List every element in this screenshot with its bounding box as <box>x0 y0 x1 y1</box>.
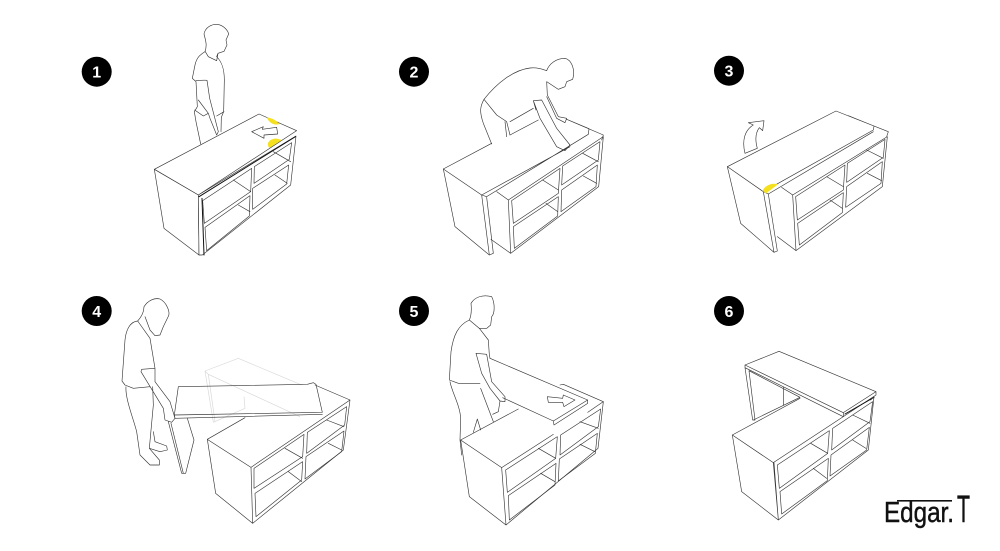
ghost panel position <box>205 358 302 422</box>
person holding panel <box>122 299 175 465</box>
number badge 6: 6 <box>725 304 734 321</box>
step 6 <box>714 296 876 520</box>
number badge 5 <box>399 296 429 326</box>
shelf unit with side panel <box>727 111 888 252</box>
yellow marker <box>763 184 778 193</box>
number badge 5: 5 <box>410 304 419 321</box>
person bending <box>481 58 574 151</box>
curved up arrow <box>744 121 764 153</box>
shelf unit <box>461 402 603 525</box>
shelf unit <box>154 114 297 255</box>
step 4 <box>82 296 350 523</box>
number badge 4 <box>82 296 112 326</box>
step 3 <box>714 56 888 252</box>
yellow markers <box>267 118 282 148</box>
rotated desk top <box>745 351 876 420</box>
logo Edgar.T: T <box>957 489 970 531</box>
number badge 2 <box>399 57 429 87</box>
step 1 <box>82 24 297 255</box>
step 2 <box>399 57 603 255</box>
number badge 6 <box>714 296 744 326</box>
person at desk <box>449 296 505 455</box>
number badge 4: 4 <box>92 304 101 321</box>
number badge 3 <box>714 56 744 86</box>
number badge 2: 2 <box>410 64 419 82</box>
moving panel <box>168 383 322 473</box>
arrow left <box>252 127 278 138</box>
step 5 <box>399 296 603 525</box>
panel with arrow <box>490 358 603 425</box>
logo Edgar.T: Edgar. <box>884 497 954 529</box>
shelf unit <box>732 397 874 520</box>
shelf unit with side sliding <box>443 119 603 255</box>
number badge 1: 1 <box>92 64 101 82</box>
number badge 3: 3 <box>725 64 734 80</box>
number badge 1 <box>82 57 112 87</box>
person standing <box>192 24 229 144</box>
shelf unit <box>207 385 350 523</box>
